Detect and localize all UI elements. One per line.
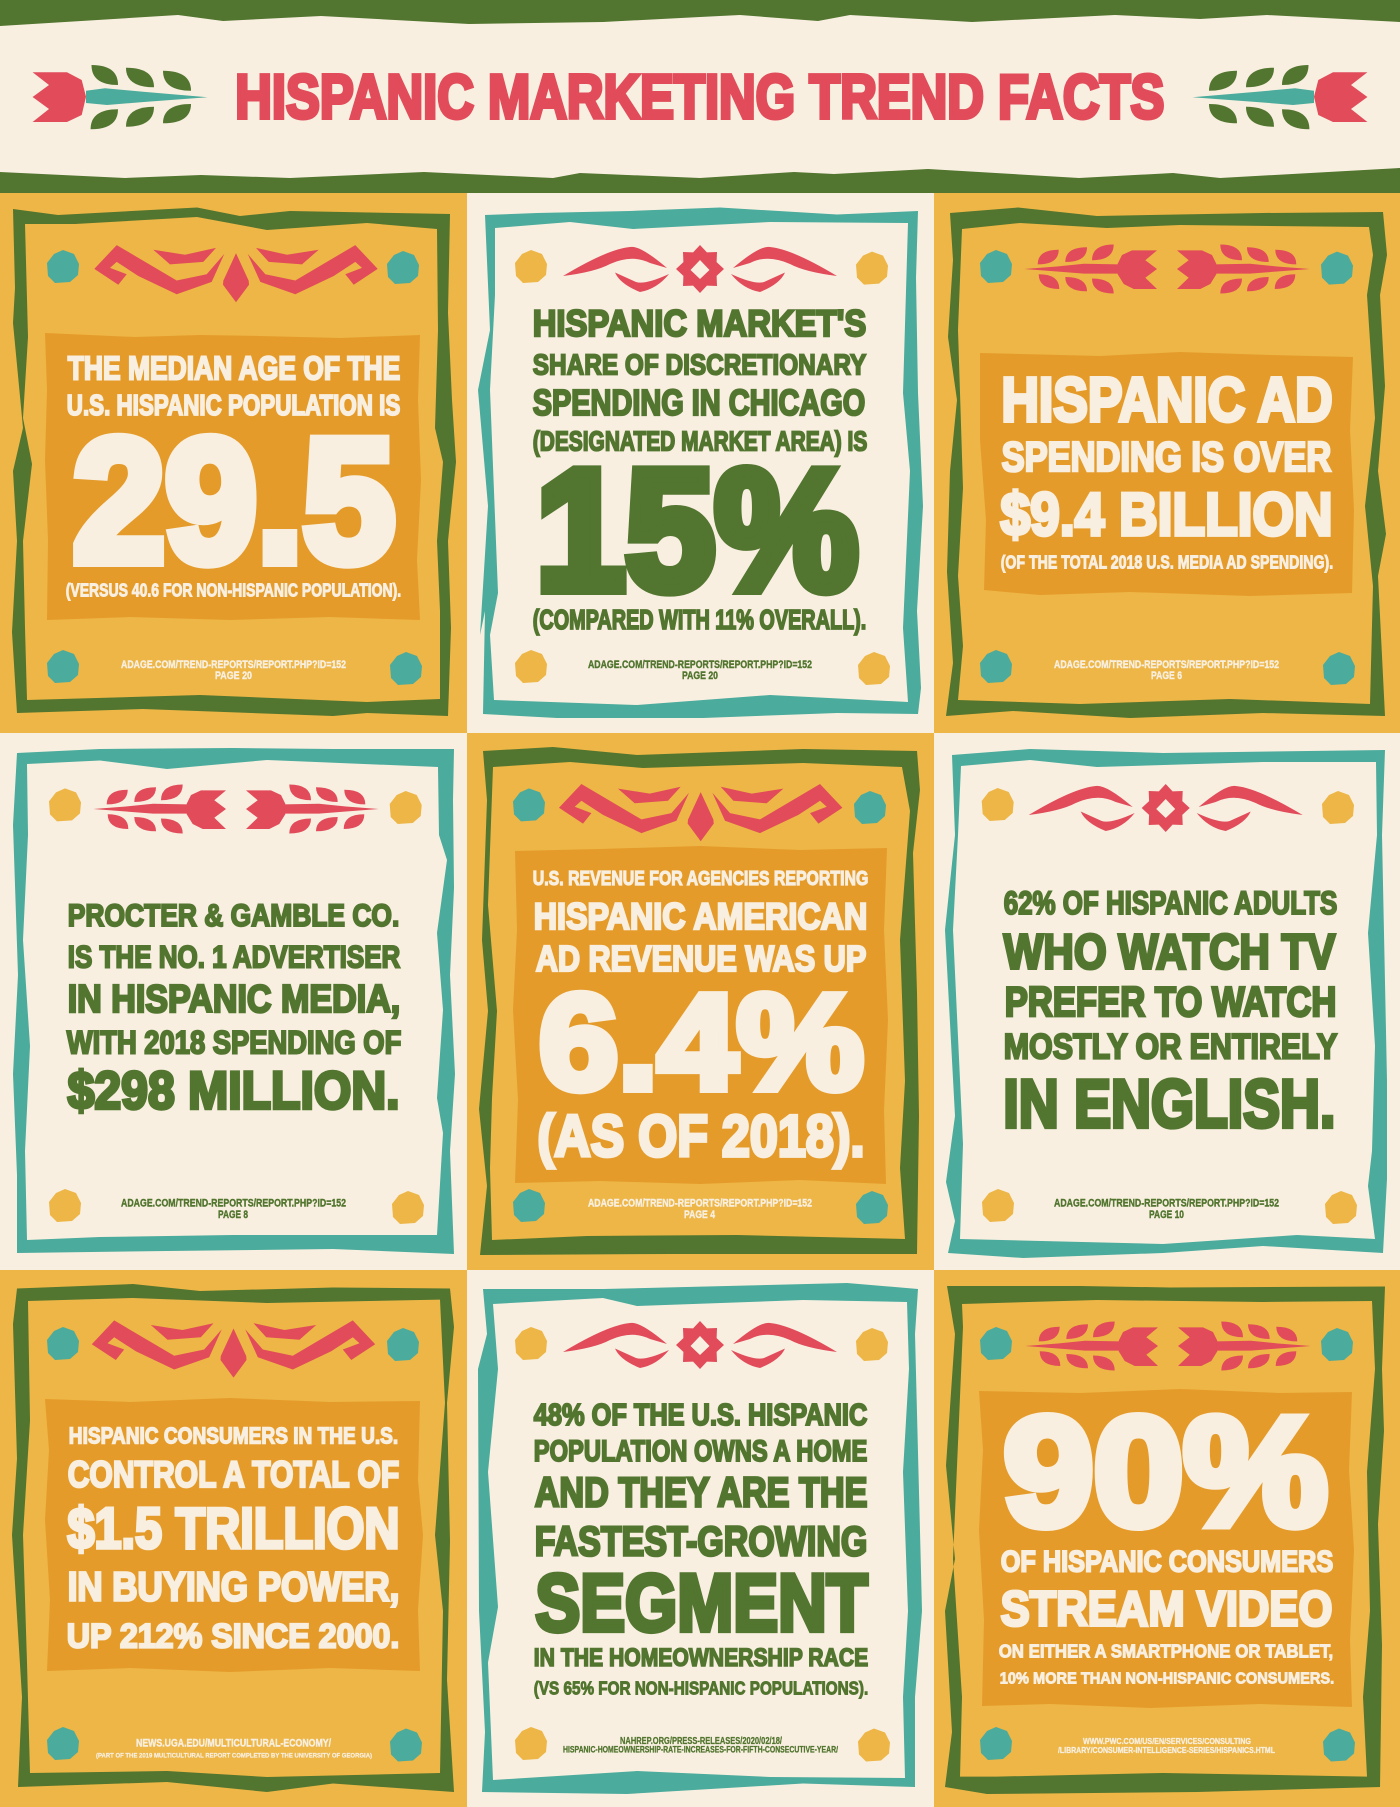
stat text — [67, 1422, 399, 1656]
orange text box — [45, 333, 421, 620]
corner dots — [515, 1327, 890, 1762]
orange text box — [979, 1389, 1354, 1708]
icon: right flower branch — [1192, 65, 1367, 129]
corner dots — [980, 1327, 1355, 1762]
orange text box — [513, 846, 888, 1184]
green frame — [479, 747, 920, 1255]
stat text: (VS 65% FOR NON-HISPANIC POPULATIONS). — [534, 1678, 868, 1698]
green frame — [12, 208, 456, 716]
corner dots — [982, 788, 1357, 1224]
source: ADAGE.COM/TREND-REPORTS/REPORT.PHP?ID=152 — [588, 1197, 812, 1209]
tile background — [467, 193, 934, 733]
stat text: MOSTLY OR ENTIRELY — [1004, 1028, 1337, 1067]
stat text: U.S. REVENUE FOR AGENCIES REPORTING — [533, 867, 868, 890]
source: PAGE 4 — [684, 1209, 716, 1221]
stat text: HISPANIC MARKET'S — [533, 302, 866, 344]
stat text: WITH 2018 SPENDING OF — [67, 1024, 401, 1060]
stat text: SPENDING IN CHICAGO — [533, 382, 865, 423]
corner dots — [47, 1327, 422, 1762]
source — [1054, 659, 1279, 682]
stat text: 10% MORE THAN NON-HISPANIC CONSUMERS. — [1000, 1670, 1334, 1688]
stat text: IN HISPANIC MEDIA, — [68, 978, 400, 1021]
stat text: 48% OF THE U.S. HISPANIC — [534, 1398, 867, 1432]
source: HISPANIC-HOMEOWNERSHIP-RATE-INCREASES-FOR-FIFTH-CONSECUTIVE-YEAR/ — [563, 1744, 838, 1754]
stat text: HISPANIC AD — [1002, 365, 1332, 435]
source: ADAGE.COM/TREND-REPORTS/REPORT.PHP?ID=152 — [588, 659, 812, 671]
ornament: red star and arcs — [563, 245, 837, 293]
header bottom green strip — [0, 168, 1400, 193]
panel: streaming video — [934, 1270, 1400, 1807]
source: WWW.PWC.COM/US/EN/SERVICES/CONSULTING — [1083, 1736, 1251, 1746]
stat text: STREAM VIDEO — [1001, 1582, 1332, 1636]
stat text: IN BUYING POWER, — [68, 1564, 399, 1610]
panel: TV language — [934, 733, 1400, 1270]
tile background — [934, 733, 1400, 1270]
stat text: AND THEY ARE THE — [535, 1469, 867, 1516]
stat text: IN THE HOMEOWNERSHIP RACE — [534, 1644, 868, 1672]
panel: homeownership — [467, 1270, 934, 1807]
tile background — [934, 1270, 1400, 1807]
stat text: UP 212% SINCE 2000. — [67, 1618, 399, 1656]
source: PAGE 8 — [218, 1209, 248, 1221]
stat text: 6.4% — [539, 966, 864, 1118]
stat text: POPULATION OWNS A HOME — [534, 1435, 867, 1468]
title: HISPANIC MARKETING TREND FACTS — [235, 63, 1164, 132]
source: PAGE 20 — [215, 670, 252, 682]
stat text: OF HISPANIC CONSUMERS — [1001, 1546, 1333, 1579]
source — [121, 659, 346, 682]
tile background — [934, 193, 1400, 733]
source: NEWS.UGA.EDU/MULTICULTURAL-ECONOMY/ — [136, 1738, 331, 1750]
corner dots — [515, 250, 890, 685]
stat text: ON EITHER A SMARTPHONE OR TABLET, — [999, 1642, 1333, 1662]
stat text: U.S. HISPANIC POPULATION IS — [67, 390, 400, 422]
stat text: HISPANIC CONSUMERS IN THE U.S. — [69, 1422, 398, 1448]
panel: Chicago share — [467, 193, 934, 733]
source: (PART OF THE 2019 MULTICULTURAL REPORT COMPLETED BY THE UNIVERSITY OF GEORGIA) — [96, 1753, 372, 1760]
stat text — [1003, 885, 1337, 1142]
stat text: SEGMENT — [535, 1558, 868, 1648]
stat text: (COMPARED WITH 11% OVERALL). — [533, 604, 866, 635]
stat text — [533, 867, 868, 1169]
panel: agency revenue — [467, 733, 934, 1270]
corner dots — [49, 788, 424, 1224]
tile background — [0, 1270, 467, 1807]
stat text: SHARE OF DISCRETIONARY — [533, 349, 866, 381]
stat text: (AS OF 2018). — [538, 1104, 864, 1169]
source — [1054, 1197, 1279, 1221]
source — [1058, 1736, 1275, 1755]
stat text: SPENDING IS OVER — [1002, 434, 1331, 480]
stat text: FASTEST-GROWING — [535, 1519, 867, 1565]
stat text — [67, 898, 401, 1120]
stat text: HISPANIC AMERICAN — [534, 895, 867, 937]
stat text — [999, 1386, 1334, 1688]
source — [563, 1736, 838, 1754]
stat text: 29.5 — [73, 404, 395, 599]
ornament: red swirl — [559, 784, 842, 841]
teal frame — [13, 748, 455, 1254]
tile background — [0, 193, 467, 733]
header top green strip — [0, 0, 1400, 26]
ornament: red mirrored flowers — [93, 784, 379, 834]
stat text — [533, 302, 867, 635]
stat text: (VERSUS 40.6 FOR NON-HISPANIC POPULATION). — [66, 580, 401, 602]
teal frame — [478, 208, 923, 718]
icon: left flower branch — [33, 65, 208, 129]
stat text: IN ENGLISH. — [1003, 1066, 1335, 1142]
panel: ad spending — [934, 193, 1400, 733]
stat text: PROCTER & GAMBLE CO. — [68, 898, 399, 933]
source: ADAGE.COM/TREND-REPORTS/REPORT.PHP?ID=152 — [121, 1197, 346, 1209]
corner dots — [47, 250, 422, 685]
panel: Procter and Gamble — [0, 733, 467, 1270]
source: ADAGE.COM/TREND-REPORTS/REPORT.PHP?ID=152 — [1054, 659, 1279, 671]
corner dots — [513, 788, 888, 1224]
teal frame — [945, 749, 1387, 1258]
ornament: red mirrored flowers — [1025, 1322, 1311, 1370]
source: /LIBRARY/CONSUMER-INTELLIGENCE-SERIES/HISPANICS.HTML — [1058, 1745, 1275, 1755]
stat text — [1000, 365, 1333, 573]
stat text — [534, 1398, 868, 1698]
stat text: (DESIGNATED MARKET AREA) IS — [533, 425, 867, 456]
source: ADAGE.COM/TREND-REPORTS/REPORT.PHP?ID=152 — [1054, 1197, 1279, 1209]
source: PAGE 20 — [682, 670, 718, 682]
source: NAHREP.ORG/PRESS-RELEASES/2020/02/18/ — [620, 1736, 782, 1747]
tile background — [0, 733, 467, 1270]
stat text: WHO WATCH TV — [1004, 924, 1335, 979]
source — [96, 1738, 372, 1760]
stat text: $1.5 TRILLION — [68, 1497, 400, 1561]
ornament: red mirrored flowers — [1024, 244, 1310, 294]
ornament: red swirl — [92, 1320, 375, 1378]
header banner — [0, 0, 1400, 193]
orange text box — [45, 1398, 423, 1672]
green frame — [12, 1284, 454, 1792]
tile background — [467, 733, 934, 1270]
source — [588, 659, 812, 682]
ornament: red star and arcs — [1029, 784, 1303, 832]
stat text: AD REVENUE WAS UP — [536, 938, 866, 979]
source — [588, 1197, 812, 1221]
source — [121, 1197, 346, 1221]
stat text: 15% — [536, 435, 858, 626]
panel: median age — [0, 193, 467, 733]
stat text: $9.4 BILLION — [1000, 480, 1332, 548]
teal frame — [478, 1283, 922, 1794]
stat text: THE MEDIAN AGE OF THE — [68, 350, 400, 388]
source: ADAGE.COM/TREND-REPORTS/REPORT.PHP?ID=152 — [121, 659, 346, 671]
stat text: $298 MILLION. — [68, 1061, 399, 1120]
green frame — [945, 1286, 1385, 1794]
ornament: red swirl — [94, 245, 378, 302]
stat text: 90% — [1004, 1386, 1328, 1558]
orange text box — [980, 352, 1354, 596]
green frame — [946, 208, 1387, 718]
stat text: CONTROL A TOTAL OF — [68, 1454, 399, 1495]
ornament: red star and arcs — [563, 1321, 837, 1369]
source: PAGE 10 — [1149, 1209, 1184, 1221]
tile background — [467, 1270, 934, 1807]
source: PAGE 6 — [1151, 670, 1182, 682]
stat text: PREFER TO WATCH — [1005, 978, 1336, 1025]
panel: buying power — [0, 1270, 467, 1807]
stat text: IS THE NO. 1 ADVERTISER — [68, 938, 400, 974]
corner dots — [980, 250, 1355, 685]
